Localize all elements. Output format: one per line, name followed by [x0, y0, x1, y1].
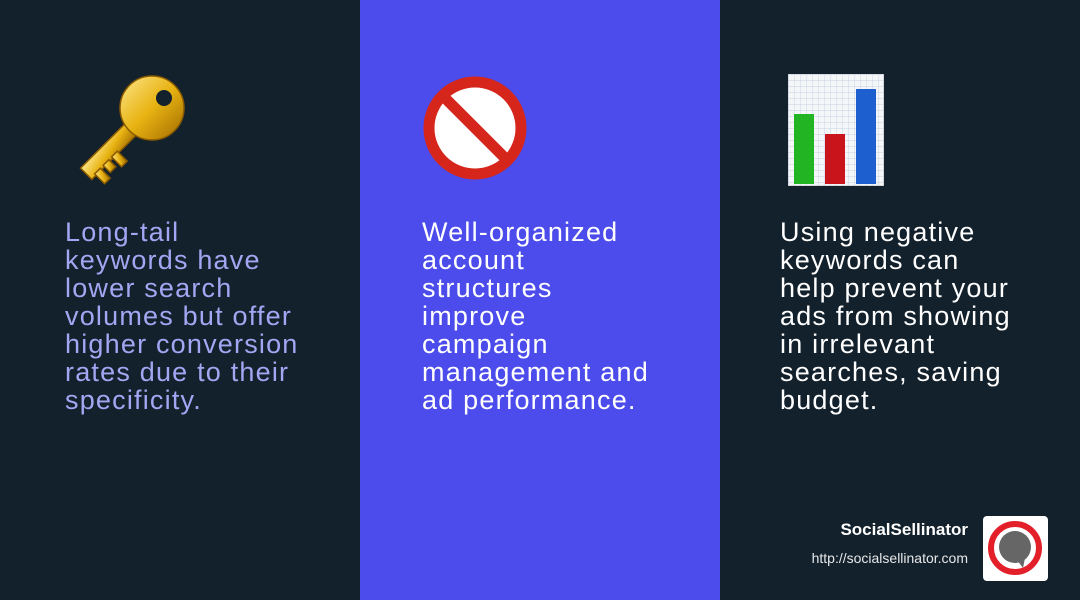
- text: right: in irrelevant: [780, 329, 935, 359]
- brand name: SocialSellinator: [840, 520, 968, 539]
- text: middle: [422, 217, 649, 415]
- icon: no entry: [424, 76, 526, 180]
- text: middle: management and: [422, 357, 649, 387]
- text: right: [780, 217, 1011, 415]
- icon: bar chart: [788, 74, 884, 186]
- text: right: budget.: [780, 385, 878, 415]
- panel: middle: [360, 0, 720, 600]
- text: left: lower search: [65, 273, 232, 303]
- text: left: Long-tail: [65, 217, 179, 247]
- text: left: specificity.: [65, 385, 202, 415]
- text: middle: Well-organized: [422, 217, 618, 247]
- text: middle: structures: [422, 273, 553, 303]
- text: middle: ad performance.: [422, 385, 637, 415]
- text: left: higher conversion: [65, 329, 299, 359]
- icon: key: [80, 75, 185, 185]
- text: middle: account: [422, 245, 525, 275]
- text: left: rates due to their: [65, 357, 289, 387]
- text: right: Using negative: [780, 217, 975, 247]
- text: right: keywords can: [780, 245, 959, 275]
- panel: right: [720, 0, 1080, 600]
- logo: [983, 516, 1048, 581]
- text: left: keywords have: [65, 245, 261, 275]
- text: left: [65, 217, 299, 415]
- brand url: http://socialsellinator.com: [812, 550, 968, 566]
- text: middle: campaign: [422, 329, 549, 359]
- text: left: volumes but offer: [65, 301, 292, 331]
- text: right: help prevent your: [780, 273, 1009, 303]
- panel: left: [0, 0, 360, 600]
- text: middle: improve: [422, 301, 526, 331]
- text: right: ads from showing: [780, 301, 1011, 331]
- text: right: searches, saving: [780, 357, 1002, 387]
